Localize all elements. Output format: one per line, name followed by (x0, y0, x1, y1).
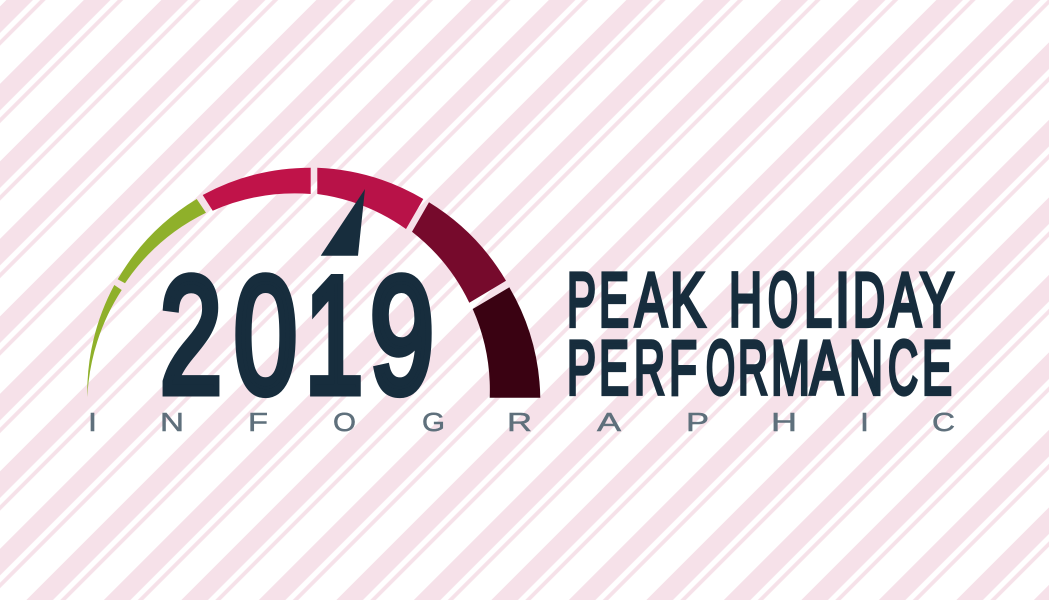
title: PERFORMANCE: C (888, 326, 918, 411)
icon: gauge needle (321, 189, 365, 256)
year heading: 2019: 1 (305, 243, 363, 427)
subtitle: INFOGRAPHIC: I (88, 407, 97, 437)
subtitle: INFOGRAPHIC: R (507, 407, 532, 437)
title: PERFORMANCE: E (599, 326, 629, 411)
gauge segment: maroon (412, 202, 506, 303)
year heading: 2019: 0 (234, 243, 297, 427)
title: PEAK HOLIDAY: K (670, 258, 705, 343)
title: PERFORMANCE: R (634, 326, 665, 411)
title: PEAK HOLIDAY (567, 258, 954, 343)
title: PEAK HOLIDAY: L (804, 258, 832, 343)
subtitle: INFOGRAPHIC: G (422, 407, 445, 437)
title: PERFORMANCE: E (922, 326, 952, 411)
year heading: 2019 (160, 243, 434, 427)
subtitle: INFOGRAPHIC: P (686, 407, 709, 437)
year heading: 2019: 2 (160, 243, 222, 427)
subtitle: INFOGRAPHIC: N (160, 407, 184, 437)
year heading: 2019: 9 (370, 243, 434, 427)
gauge: speedometer arc (87, 168, 540, 398)
gauge segment: dark maroon (473, 287, 540, 398)
title: PERFORMANCE: R (738, 326, 768, 411)
subtitle: INFOGRAPHIC: H (771, 407, 797, 437)
title: PERFORMANCE: N (849, 326, 883, 411)
title: PEAK HOLIDAY: I (835, 258, 850, 343)
title: PEAK HOLIDAY: D (853, 258, 885, 343)
subtitle: INFOGRAPHIC: O (333, 407, 356, 437)
title: PERFORMANCE: A (810, 326, 843, 411)
title: PEAK HOLIDAY: H (729, 258, 762, 343)
subtitle: INFOGRAPHIC: I (860, 407, 869, 437)
title: PERFORMANCE: M (771, 326, 810, 411)
gauge segment: red (203, 168, 311, 211)
title: PERFORMANCE: O (706, 326, 735, 411)
title: PEAK HOLIDAY: E (599, 258, 629, 343)
title: PEAK HOLIDAY: Y (920, 258, 954, 343)
title: PERFORMANCE (567, 326, 952, 411)
subtitle: INFOGRAPHIC: A (597, 407, 622, 437)
title: PEAK HOLIDAY: O (768, 258, 798, 343)
gauge segment: crimson (317, 168, 423, 229)
title: PEAK HOLIDAY: A (889, 258, 921, 343)
title: PERFORMANCE: P (567, 326, 596, 411)
subtitle: INFOGRAPHIC: C (932, 407, 955, 437)
gauge segment: green tip (87, 285, 122, 397)
title: PERFORMANCE: F (669, 326, 697, 411)
title: PEAK HOLIDAY: A (635, 258, 667, 343)
subtitle: INFOGRAPHIC: F (248, 407, 268, 437)
subtitle: INFOGRAPHIC (88, 407, 955, 437)
gauge segment: green (118, 199, 206, 283)
title: PEAK HOLIDAY: P (567, 258, 596, 343)
